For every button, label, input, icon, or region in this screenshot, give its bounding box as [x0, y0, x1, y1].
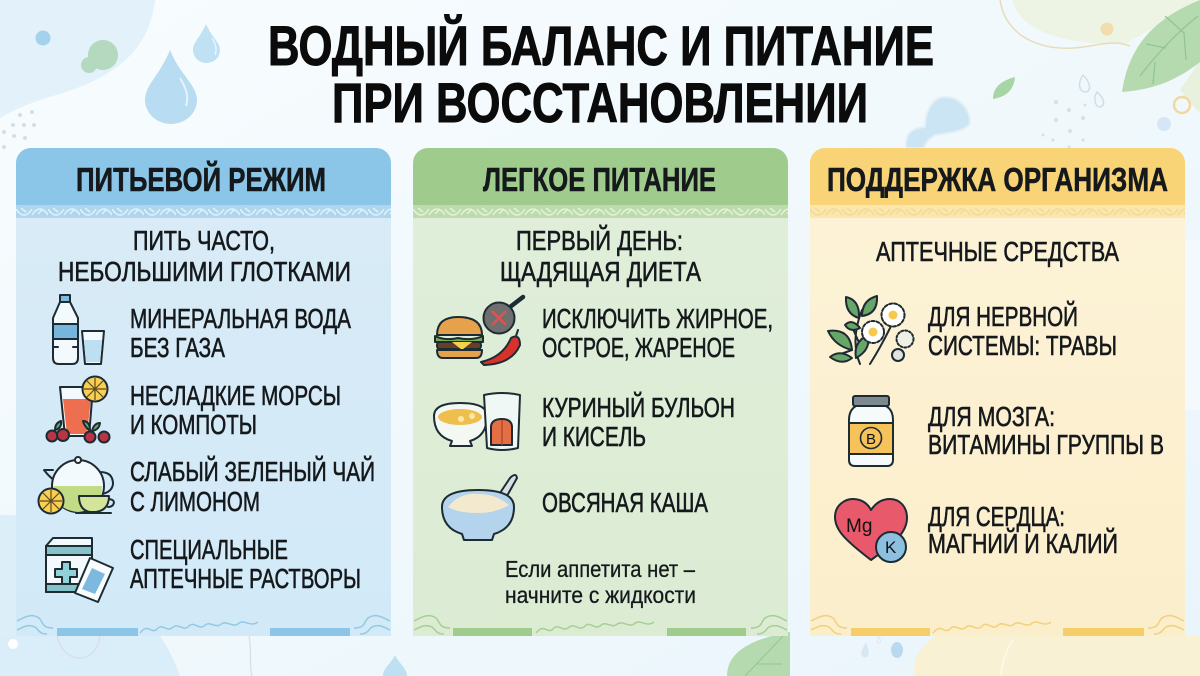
icon: oatmeal bowl — [442, 475, 517, 540]
panel: drinking regimen — [16, 148, 391, 636]
text: heart: ДЛЯ СЕРДЦА: — [928, 501, 1065, 532]
icon: heart with Mg and K: Mg — [846, 516, 872, 537]
icon: burger, pan and chili — [435, 297, 523, 365]
text: nervous system: СИСТЕМЫ: ТРАВЫ — [928, 330, 1117, 361]
text: mineral water — [130, 303, 351, 363]
text: exclude fatty: ОСТРОЕ, ЖАРЕНОЕ — [542, 332, 735, 363]
subheading: АПТЕЧНЫЕ СРЕДСТВА — [876, 236, 1120, 267]
text: exclude fatty — [542, 303, 773, 363]
text: exclude fatty: ИСКЛЮЧИТЬ ЖИРНОЕ, — [542, 303, 773, 334]
text: green tea — [130, 456, 375, 517]
panel: light food — [413, 148, 788, 636]
icon: herbs — [828, 296, 914, 364]
text: oatmeal: ОВСЯНАЯ КАША — [542, 487, 708, 518]
text: nervous system — [928, 301, 1117, 361]
title — [268, 14, 934, 134]
icon: heart with Mg and K: K — [885, 538, 897, 557]
note: no appetite: начните с жидкости — [505, 582, 696, 608]
heading: ЛЕГКОЕ ПИТАНИЕ — [483, 161, 716, 198]
text: mineral water: МИНЕРАЛЬНАЯ ВОДА — [130, 303, 351, 334]
text: heart — [928, 501, 1118, 559]
text: nervous system: ДЛЯ НЕРВНОЙ — [928, 301, 1078, 332]
subheading — [58, 225, 351, 287]
text: pharmacy solutions — [130, 534, 361, 594]
text: mineral water: БЕЗ ГАЗА — [130, 332, 225, 363]
text: fruit drinks: И КОМПОТЫ — [130, 409, 257, 440]
decoration: water drops and dots, left — [2, 24, 220, 149]
icon: broth and kissel — [434, 393, 520, 450]
text: green tea: СЛАБЫЙ ЗЕЛЕНЫЙ ЧАЙ — [130, 456, 375, 487]
text: broth and kissel: КУРИНЫЙ БУЛЬОН — [542, 392, 735, 423]
text: fruit drinks — [130, 380, 341, 440]
subheading: ЩАДЯЩАЯ ДИЕТА — [500, 256, 702, 287]
title: ПРИ ВОССТАНОВЛЕНИИ — [332, 71, 868, 134]
subheading — [500, 225, 702, 287]
text: brain: ДЛЯ МОЗГА: — [928, 401, 1055, 432]
text: broth and kissel: И КИСЕЛЬ — [542, 421, 646, 452]
heading: ПИТЬЕВОЙ РЕЖИМ — [76, 160, 326, 198]
icon: vitamin B jar: B — [866, 431, 876, 448]
text: pharmacy solutions: СПЕЦИАЛЬНЫЕ — [130, 534, 288, 565]
text: broth and kissel — [542, 392, 735, 452]
icon: vitamin B jar — [849, 396, 893, 466]
icon: fruit drink — [46, 376, 110, 442]
icon: water bottle and glass — [53, 295, 104, 364]
icon: teapot with lemon — [38, 457, 114, 514]
subheading: ПЕРВЫЙ ДЕНЬ: — [516, 225, 683, 256]
text: green tea: С ЛИМОНОМ — [130, 486, 260, 517]
text: brain — [928, 401, 1164, 460]
title: ВОДНЫЙ БАЛАНС И ПИТАНИЕ — [268, 14, 934, 77]
panel: body support — [810, 148, 1185, 636]
text: fruit drinks: НЕСЛАДКИЕ МОРСЫ — [130, 380, 341, 411]
decoration: leaves and splash, right — [727, 0, 1200, 676]
text: heart: МАГНИЙ И КАЛИЙ — [928, 528, 1118, 559]
note: no appetite: Если аппетита нет – — [505, 556, 695, 582]
note: no appetite — [505, 556, 696, 608]
subheading: НЕБОЛЬШИМИ ГЛОТКАМИ — [58, 256, 351, 287]
icon: heart with Mg and K — [835, 499, 907, 562]
subheading: ПИТЬ ЧАСТО, — [133, 225, 275, 256]
icon: pharmacy solutions — [46, 538, 113, 602]
text: pharmacy solutions: АПТЕЧНЫЕ РАСТВОРЫ — [130, 563, 361, 594]
